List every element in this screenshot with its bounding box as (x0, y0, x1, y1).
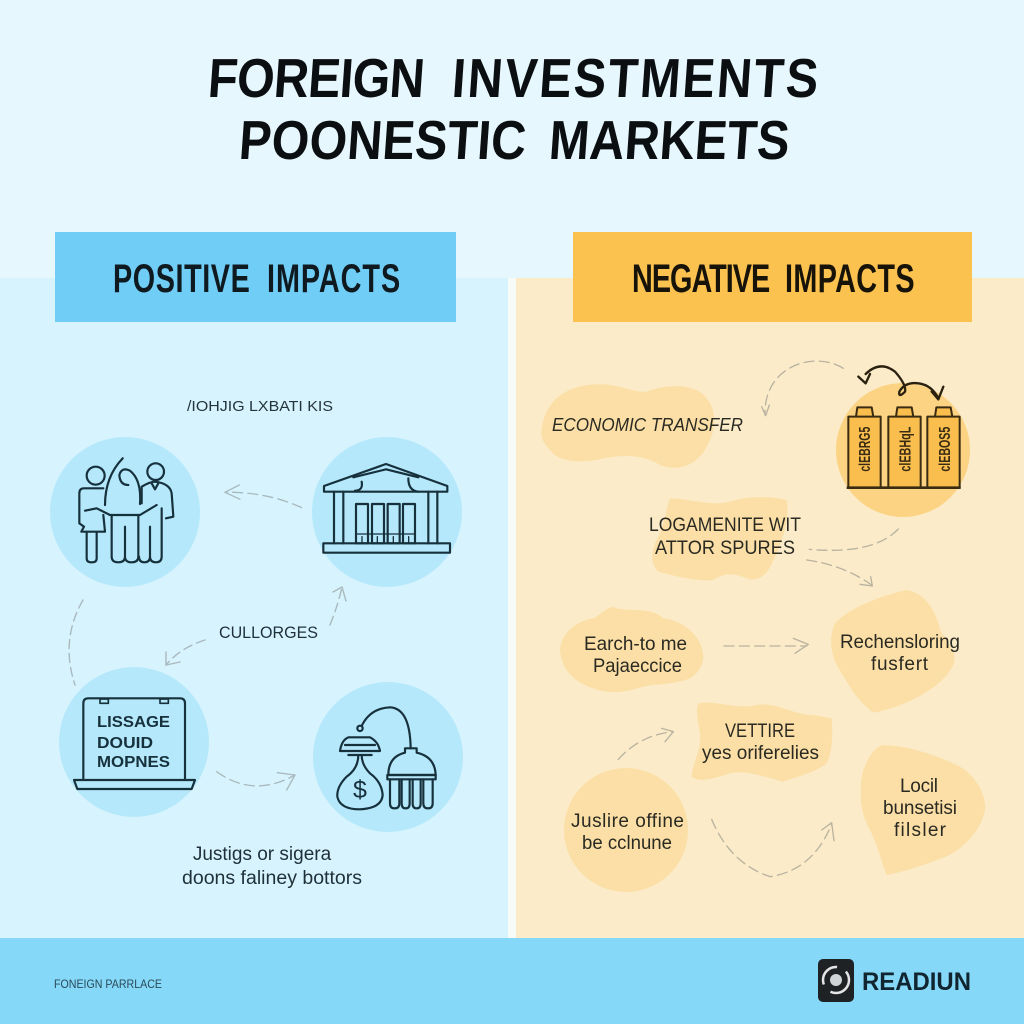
blob: vettire (692, 703, 832, 782)
icon: buildings in circle: clEBOS5 (937, 426, 954, 472)
text block: bottom left (182, 844, 362, 889)
arrow: laptop to people (69, 600, 83, 685)
heading: negative impacts (573, 232, 972, 322)
title: INVESTMENTS (450, 47, 821, 109)
logo: READIUN (862, 968, 971, 996)
icon: laptop with text: DOUID (97, 735, 153, 752)
heading: positive impacts (55, 232, 456, 322)
blob: local: filsler (894, 820, 947, 841)
blob: vettire: VETTIRE (725, 721, 795, 742)
logo (818, 959, 971, 1002)
panel: positive impacts (50, 232, 463, 889)
footer text: FONEIGN PARRLACE (54, 977, 162, 991)
icon: money bag and device: $ (353, 776, 367, 804)
arrow: justire to vettire (618, 728, 673, 759)
heading: positive impacts: IMPACTS (267, 256, 400, 301)
arrow: center to bank (330, 587, 346, 625)
blob: logamenite text: ATTOR SPURES (655, 538, 795, 559)
blob: logamenite text: LOGAMENITE WIT (649, 515, 801, 536)
blob: rechensloring: fusfert (871, 654, 929, 675)
heading: negative impacts: NEGATIVE (632, 256, 770, 301)
arrow: center to laptop (166, 640, 205, 665)
arrow: earch-to me to rechensloring (724, 638, 808, 653)
title (206, 47, 821, 171)
blob: economic transfer (541, 384, 743, 468)
arrow: buildings to economic transfer (762, 361, 843, 416)
title: POONESTIC (237, 109, 528, 171)
arrow: bank to people (225, 485, 302, 508)
circle: justire offine: Juslire offine (571, 811, 684, 832)
title: MARKETS (547, 109, 792, 171)
icon: laptop with text: MOPNES (97, 754, 170, 771)
icon: people in circle (50, 437, 200, 587)
title: FOREIGN (206, 47, 427, 109)
footer (0, 938, 1024, 1024)
label: center text: CULLORGES (219, 624, 318, 642)
blob: earch-to me (560, 607, 703, 692)
circle: justire offine (564, 768, 688, 892)
arrow: laptop to money bag (217, 772, 295, 790)
icon: money bag and device (313, 682, 463, 832)
circle: justire offine: be cclnune (582, 833, 672, 854)
icon: laptop with text: LISSAGE (97, 714, 170, 731)
blob: earch-to me: Earch-to me (584, 634, 687, 655)
blob: local (861, 745, 985, 875)
blob: vettire: yes oriferelies (702, 743, 819, 764)
blob: rechensloring: Rechensloring (840, 632, 960, 653)
text block: bottom left: Justigs or sigera (193, 844, 332, 865)
blob: local: Locil (900, 776, 938, 797)
blob: logamenite text (649, 497, 801, 580)
icon: buildings in circle: clEBRG5 (857, 426, 874, 472)
blob: earch-to me: Pajaeccice (593, 656, 682, 677)
panel: negative impacts (541, 232, 985, 892)
icon: buildings in circle: clEBHqL (897, 427, 914, 472)
text block: bottom left: doons faliney bottors (182, 868, 362, 889)
blob: local: bunsetisi (883, 798, 957, 819)
icon: bank building in circle (312, 437, 462, 587)
label: top left text: /IOHJIG LXBATI KIS (187, 398, 333, 415)
arrow: logamenite to rechensloring (807, 560, 872, 586)
heading: negative impacts: IMPACTS (785, 256, 915, 301)
icon: laptop with text (59, 667, 209, 817)
arrow: justire to local (712, 819, 834, 877)
heading: positive impacts: POSITIVE (113, 256, 250, 301)
blob: rechensloring (831, 590, 960, 713)
arrow: buildings to logamenite (809, 529, 898, 550)
blob: economic transfer: ECONOMIC TRANSFER (552, 415, 743, 435)
icon: buildings in circle (836, 366, 970, 517)
